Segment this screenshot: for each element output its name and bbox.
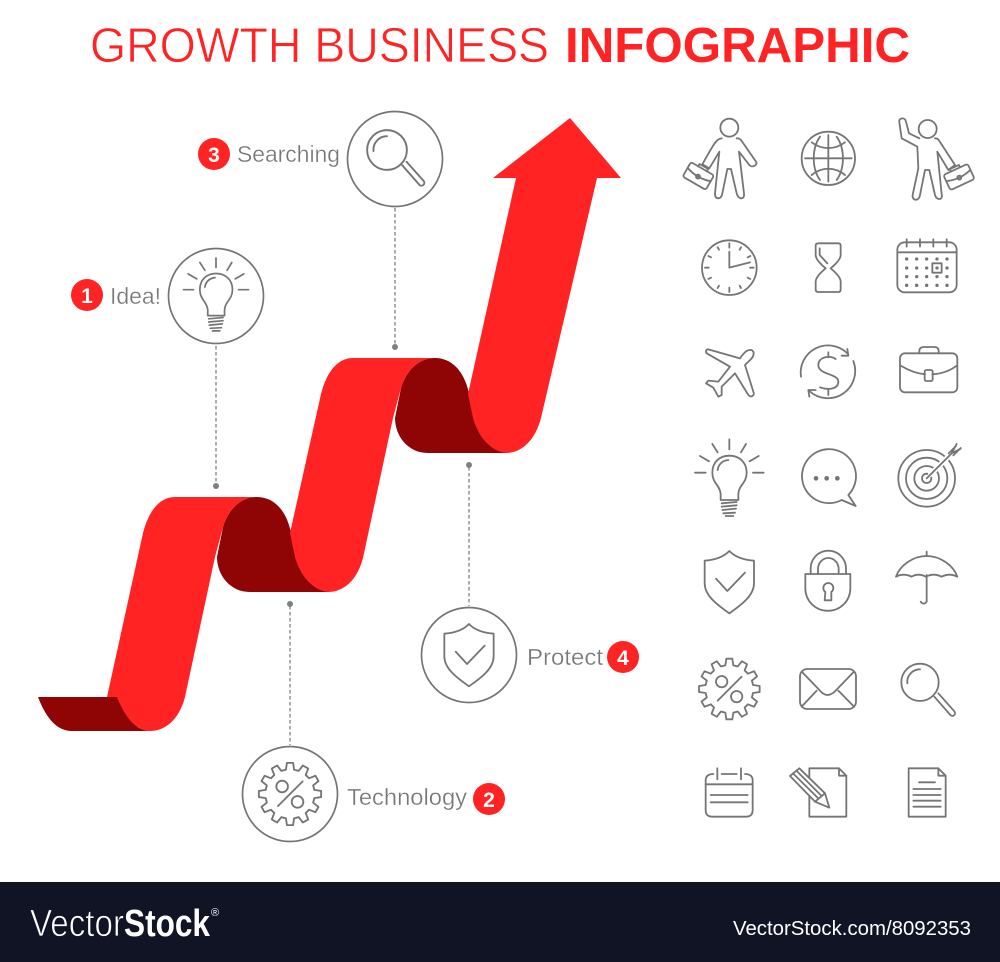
ribbon second fold: [395, 358, 508, 453]
step 4 number: [607, 641, 639, 673]
icon: globe: [802, 132, 855, 185]
icon: target: [898, 444, 961, 507]
icon: calendar: [897, 239, 957, 292]
ribbon tail fold: [38, 697, 150, 731]
ribbon first fold: [217, 497, 330, 592]
icon: briefcase: [900, 347, 957, 392]
icon: airplane: [706, 349, 754, 397]
icon: umbrella: [896, 552, 957, 604]
growth ribbon arrow: [38, 118, 621, 731]
ribbon third rise and arrowhead: [468, 118, 621, 453]
icon grid: lower rows: [695, 439, 961, 817]
icon: clock: [702, 240, 757, 295]
footer logo: [30, 903, 219, 945]
step 2: technology: [242, 746, 505, 842]
footer bar: [0, 882, 1000, 962]
title: GROWTH BUSINESS: [90, 19, 549, 73]
title: [90, 19, 910, 73]
icon: businessman left: [683, 119, 756, 198]
icon: percent gear: [699, 659, 760, 719]
footer logo: ®: [211, 907, 219, 919]
icon: speech bubble: [802, 449, 856, 506]
step 3 icon: magnifier: [348, 112, 442, 206]
icon: magnifier: [901, 664, 955, 716]
icon: notepad: [706, 768, 753, 817]
step 1: idea: [71, 248, 264, 344]
step 1 number: [71, 279, 103, 311]
step 4: protect: [422, 608, 639, 702]
title: INFOGRAPHIC: [565, 19, 910, 73]
step 2 number: [473, 783, 505, 815]
icon: shield: [705, 551, 754, 613]
step 2 label: Technology: [347, 784, 468, 810]
ribbon second rise: [290, 358, 435, 592]
connector: technology: [287, 601, 293, 745]
step 3 label: Searching: [237, 141, 340, 167]
footer logo: Vector: [30, 903, 124, 945]
step 1 label: Idea!: [110, 283, 161, 309]
step 4 number: 4: [617, 647, 629, 670]
icon: dollar cycle: [801, 345, 855, 398]
step 4 icon: shield: [422, 608, 516, 702]
step 1 icon: light bulb: [168, 248, 264, 344]
step 3 number: [198, 138, 230, 170]
step 2 number: 2: [483, 789, 495, 812]
connector: protect: [466, 462, 472, 606]
icon: businessman waving: [899, 118, 975, 200]
connector: idea: [213, 346, 219, 489]
step 4 label: Protect: [527, 644, 604, 670]
icon: document with pencil: [790, 768, 846, 817]
connector: searching: [392, 208, 398, 350]
footer url: VectorStock.com/8092353: [733, 917, 971, 940]
step 3: searching: [198, 112, 442, 206]
icon: light bulb: [695, 439, 764, 516]
step 1 number: 1: [81, 285, 93, 308]
icon: hourglass: [816, 243, 841, 292]
ribbon first rise: [107, 497, 257, 731]
icon grid: upper rows: [683, 118, 975, 398]
step 3 number: 3: [208, 144, 220, 167]
icon: document: [909, 768, 946, 817]
footer logo: Stock: [124, 903, 211, 945]
icon: envelope: [800, 669, 856, 709]
step 2 icon: gear: [242, 746, 338, 842]
icon: padlock: [805, 551, 850, 611]
